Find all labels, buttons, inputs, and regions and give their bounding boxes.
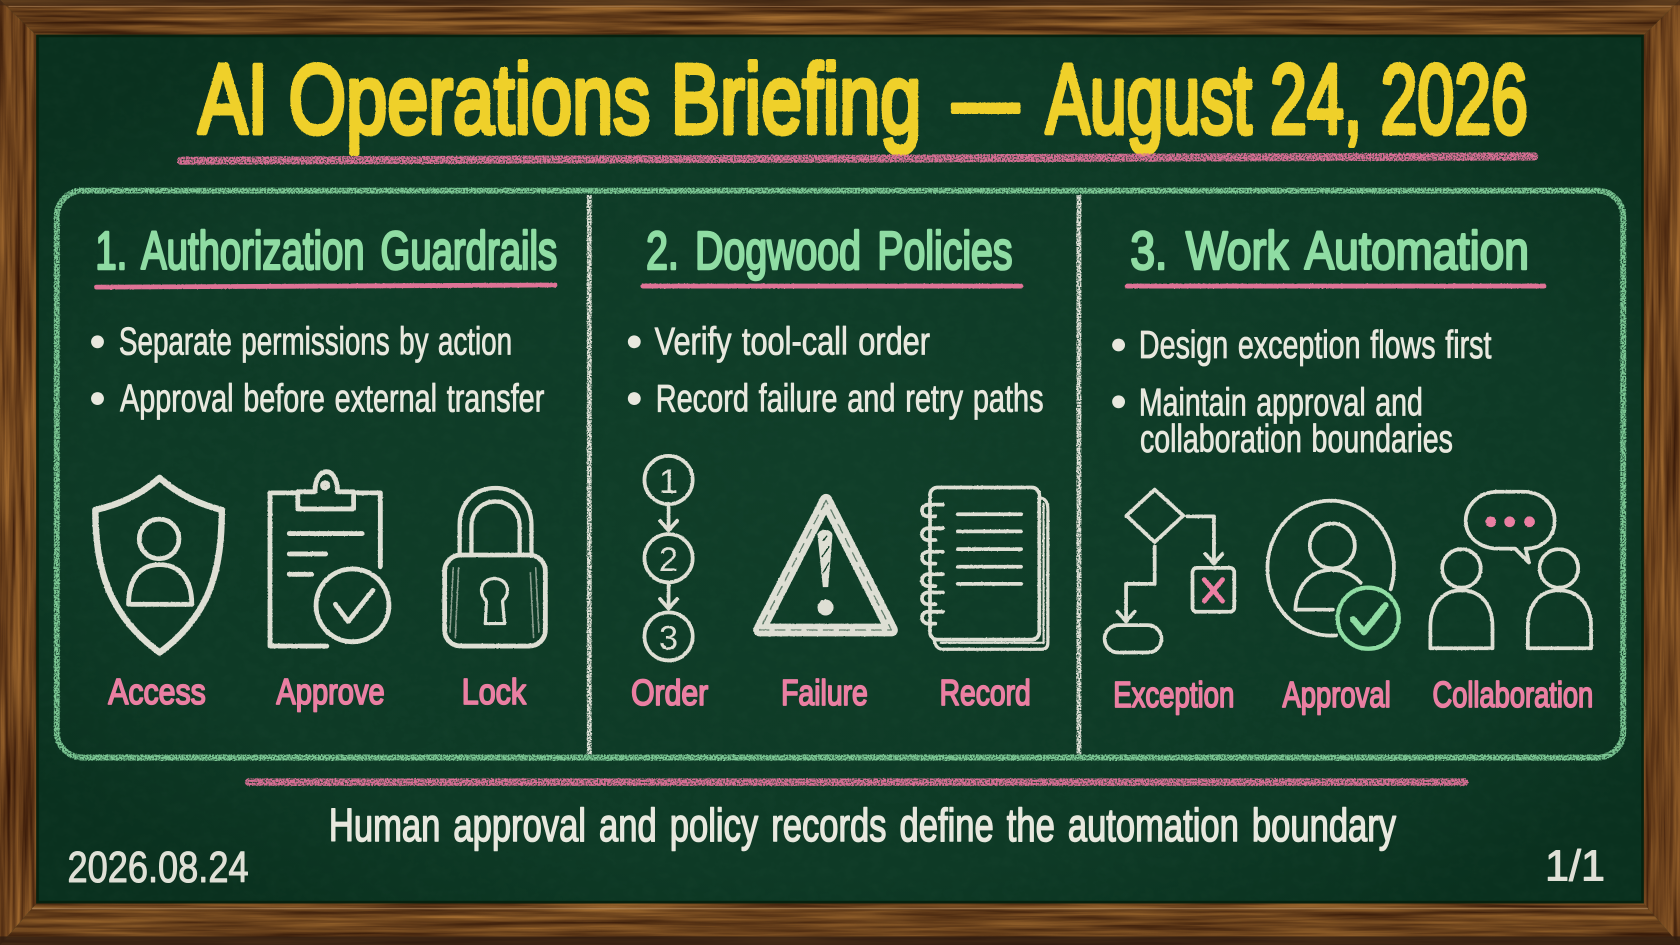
icon: warning triangle — [760, 500, 891, 630]
bullets: automation: Design exception flows first — [1139, 324, 1492, 367]
label: approval: Approval — [1282, 674, 1391, 715]
icon: exception flowchart — [1105, 490, 1234, 652]
label: approve: Approve — [276, 671, 385, 712]
icon: shield with person — [95, 478, 222, 652]
bullets: dogwood — [628, 321, 1044, 420]
title: — — [952, 44, 1019, 154]
heading: authorization guardrails: 1. Authorization Guardrails — [95, 222, 557, 281]
icon: approved person — [1267, 501, 1399, 649]
title: AI Operations Briefing — [198, 44, 921, 154]
icon: spiral notebook — [922, 488, 1048, 649]
bullets: automation: Maintain approval and — [1139, 382, 1423, 425]
bullets: dogwood: Record failure and retry paths — [656, 377, 1044, 420]
bullets: authorization: Separate permissions by action — [119, 321, 512, 364]
page number: 1/1 — [1545, 842, 1605, 891]
label: failure: Failure — [781, 672, 868, 713]
icon: padlock — [445, 488, 545, 646]
icon: numbered steps: 3 — [659, 619, 678, 657]
date: 2026.08.24 — [68, 843, 249, 892]
column 1: authorization guardrails — [91, 222, 557, 712]
label: record: Record — [940, 672, 1031, 713]
label: order: Order — [631, 672, 708, 713]
three-column panel — [57, 191, 1623, 757]
title underline — [181, 156, 1534, 161]
label: access: Access — [108, 671, 206, 712]
bottom divider line — [249, 779, 1465, 786]
icon: collaboration — [1430, 492, 1591, 648]
bullets: authorization — [91, 321, 544, 420]
bullets: automation: collaboration boundaries — [1140, 418, 1453, 461]
bullets: authorization: Approval before external transfer — [120, 377, 544, 420]
column 2: dogwood policies — [628, 222, 1048, 713]
label: collaboration: Collaboration — [1432, 674, 1593, 715]
icon: numbered steps: 2 — [659, 541, 678, 579]
icon: numbered steps — [644, 456, 693, 661]
heading: dogwood policies: 2. Dogwood Policies — [646, 222, 1013, 281]
heading: work automation: 3. Work Automation — [1130, 222, 1529, 281]
label: lock: Lock — [462, 671, 527, 712]
column 3: work automation — [1105, 222, 1593, 715]
label: exception: Exception — [1113, 674, 1234, 715]
icon: clipboard with check — [270, 472, 389, 646]
bullets: dogwood: Verify tool-call order — [655, 321, 930, 364]
bullets: automation — [1112, 324, 1492, 461]
icon: numbered steps: 1 — [659, 463, 678, 501]
